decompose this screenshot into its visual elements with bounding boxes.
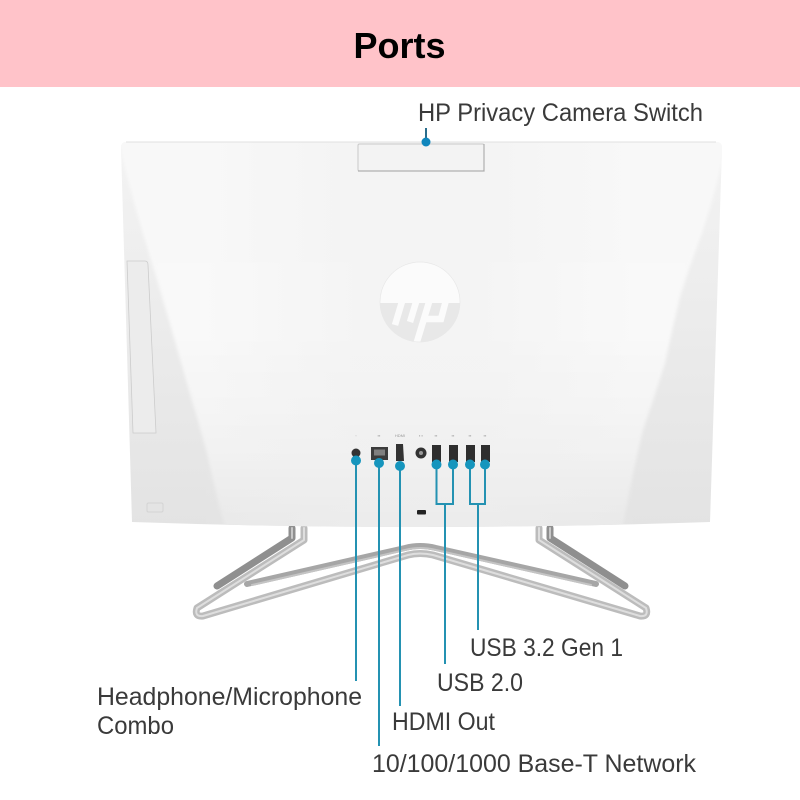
ethernet port — [371, 447, 388, 460]
HP logo — [380, 258, 460, 345]
side access door — [127, 261, 156, 433]
port legends: ◦ — [355, 433, 357, 438]
port legends: ▪▪ — [378, 433, 381, 438]
camera switch leader — [425, 128, 427, 142]
port panel — [352, 433, 490, 514]
port legends: HDMI — [395, 433, 405, 438]
network leader — [378, 463, 380, 746]
port legends: ▪▪ — [452, 433, 455, 438]
HDMI leader — [399, 466, 401, 706]
callout lines — [356, 128, 485, 746]
title: Ports — [353, 25, 446, 66]
monitor back — [118, 140, 726, 532]
callout dots — [351, 138, 490, 471]
lock slot — [417, 510, 426, 514]
rear arms — [217, 528, 625, 586]
headphone label: Headphone/Microphone — [97, 683, 362, 711]
header banner — [0, 0, 800, 87]
power port — [416, 448, 426, 458]
port legends: ▪▪ — [484, 433, 487, 438]
USB 3.2 label: USB 3.2 Gen 1 — [470, 634, 623, 662]
front base loop — [196, 528, 647, 616]
headphone leader — [355, 460, 357, 681]
headphone label — [97, 683, 362, 740]
port legends: ▪▪ — [435, 433, 438, 438]
camera switch label: HP Privacy Camera Switch — [418, 99, 703, 127]
USB 2.0 leader — [436, 464, 453, 664]
network label: 10/100/1000 Base-T Network — [372, 750, 696, 778]
USB 3.2 leader — [470, 464, 485, 630]
port legends: ▪ ▪ — [419, 433, 424, 438]
central facet — [138, 194, 710, 527]
stand — [196, 528, 647, 620]
floor shadows — [205, 618, 640, 622]
camera switch panel — [358, 144, 484, 171]
small logo badge — [147, 503, 163, 512]
USB 2.0 label: USB 2.0 — [437, 669, 523, 697]
USB ports — [432, 445, 490, 462]
port legends: ▪▪ — [469, 433, 472, 438]
port legends — [355, 433, 487, 438]
HDMI port — [396, 444, 404, 461]
HDMI label: HDMI Out — [392, 708, 495, 736]
labels — [97, 99, 703, 778]
audio jack — [352, 448, 360, 458]
headphone label: Combo — [97, 712, 174, 740]
